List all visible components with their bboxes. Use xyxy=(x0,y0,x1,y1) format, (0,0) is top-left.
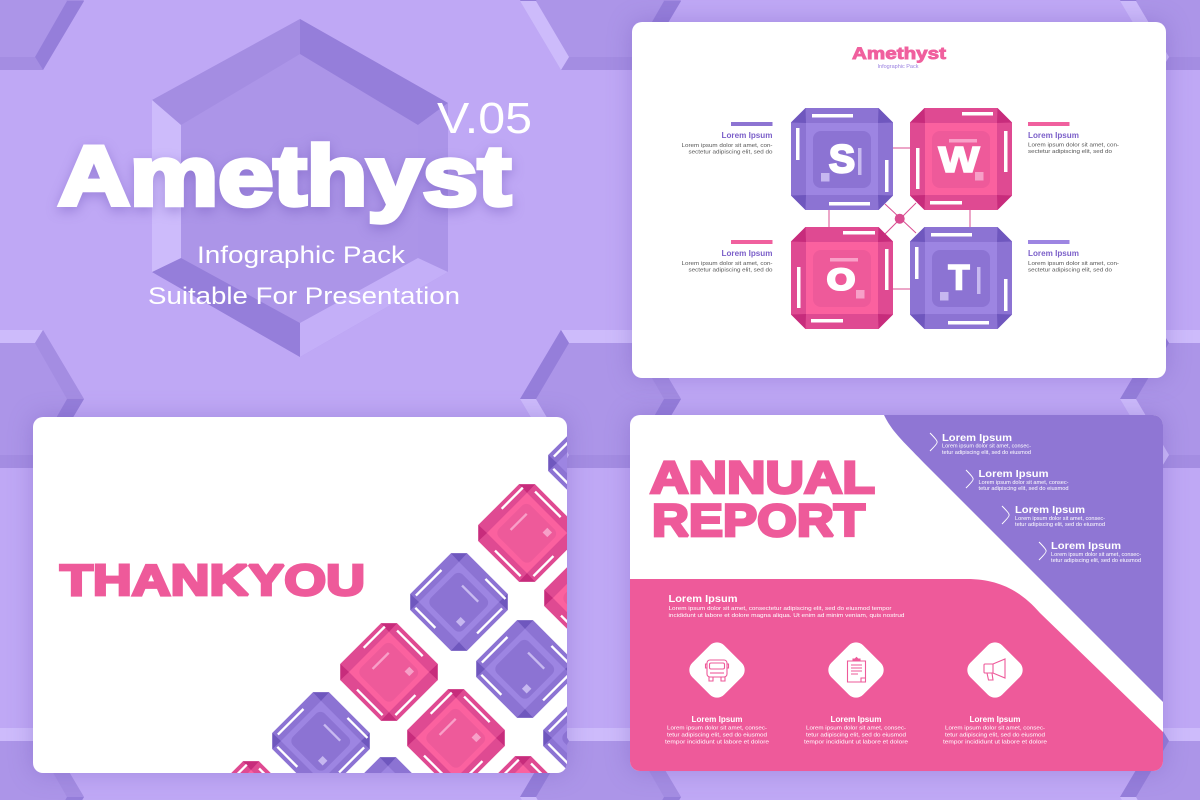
icon label 3 xyxy=(943,714,1047,746)
purple list item 3 xyxy=(1002,504,1105,528)
icon label 3: Lorem ipsum dolor sit amet, consec- xyxy=(945,726,1045,732)
SWOT label: upper left xyxy=(682,122,773,156)
thank you heading: THANKYOU xyxy=(60,556,365,605)
purple list item 4 xyxy=(1039,540,1141,564)
icon label 1: Lorem ipsum dolor sit amet, consec- xyxy=(667,726,767,732)
icon label 2: Lorem ipsum dolor sit amet, consec- xyxy=(806,726,906,732)
SWOT label: upper right: sectetur adipiscing elit, sed do xyxy=(1028,149,1112,155)
purple list item 4: Lorem ipsum dolor sit amet, consec- xyxy=(1051,552,1141,558)
purple list item 3: Lorem Ipsum xyxy=(1015,504,1085,516)
SWOT heading xyxy=(852,44,946,70)
SWOT label: upper right xyxy=(1028,122,1119,155)
purple list item 2 xyxy=(966,468,1069,492)
SWOT label: upper right: Lorem Ipsum xyxy=(1028,130,1079,140)
purple list item 2: tetur adipiscing elit, sed do eiusmod xyxy=(978,486,1068,492)
main title: Amethyst xyxy=(58,129,511,223)
SWOT label: lower left xyxy=(682,240,773,274)
SWOT label: lower right: sectetur adipiscing elit, sed do xyxy=(1028,268,1112,274)
SWOT label: upper left: Lorem Ipsum xyxy=(722,130,773,140)
SWOT label: lower left: Lorem ipsum dolor sit amet, con- xyxy=(682,261,773,267)
purple list item 4: tetur adipiscing elit, sed do eiusmod xyxy=(1051,558,1141,564)
purple list item 4: Lorem Ipsum xyxy=(1051,540,1121,552)
SWOT label: lower right: Lorem Ipsum xyxy=(1028,248,1079,258)
version label: V.05 xyxy=(437,94,532,143)
SWOT label: lower right: Lorem ipsum dolor sit amet, con- xyxy=(1028,261,1119,267)
icon: clipboard xyxy=(824,638,888,702)
icon label 3: tetur adipiscing elit, sed do eiusmod xyxy=(945,732,1045,738)
pink intro text: Lorem ipsum dolor sit amet, consectetur adipiscing elit, sed do eiusmod tempor xyxy=(668,606,892,612)
icon label 2 xyxy=(804,714,908,746)
SWOT heading: Infographic Pack xyxy=(878,64,919,70)
SWOT label: upper right: Lorem ipsum dolor sit amet, con- xyxy=(1028,142,1119,148)
panel: annual report xyxy=(630,415,1163,771)
icon: megaphone xyxy=(963,638,1027,702)
purple list item 3: Lorem ipsum dolor sit amet, consec- xyxy=(1015,516,1105,522)
purple list item 1 xyxy=(930,432,1031,456)
subtitle: Infographic Pack xyxy=(197,242,406,269)
pink intro text: incididunt ut labore et dolore magna aliqua. Ut enim ad minim veniam, quis nostrud xyxy=(668,613,904,619)
annual report heading xyxy=(650,452,875,546)
icon label 1 xyxy=(665,714,769,746)
pink intro text xyxy=(668,593,904,619)
icon label 1: tempor incididunt ut labore et dolore xyxy=(665,740,769,746)
panel: SWOT xyxy=(632,22,1166,378)
SWOT label: upper left: Lorem ipsum dolor sit amet, con- xyxy=(682,143,773,149)
icon label 1: tetur adipiscing elit, sed do eiusmod xyxy=(667,732,767,738)
icon: bus xyxy=(685,638,749,702)
gem S: S xyxy=(829,138,855,181)
icon label 2: tempor incididunt ut labore et dolore xyxy=(804,740,908,746)
purple corner section xyxy=(884,415,1163,702)
gem W: W xyxy=(938,139,980,180)
purple list item 1: tetur adipiscing elit, sed do eiusmod xyxy=(942,450,1031,456)
pink intro text: Lorem Ipsum xyxy=(668,593,738,605)
purple list item 1: Lorem ipsum dolor sit amet, consec- xyxy=(942,444,1031,450)
gem O: O xyxy=(827,264,855,296)
SWOT label: lower left: sectetur adipiscing elit, sed do xyxy=(688,268,772,274)
SWOT heading: Amethyst xyxy=(852,44,946,63)
gem S xyxy=(791,108,893,210)
gem T: T xyxy=(948,258,970,298)
purple list item 3: tetur adipiscing elit, sed do eiusmod xyxy=(1015,522,1105,528)
large amethyst hexagon xyxy=(152,19,448,357)
SWOT label: lower left: Lorem Ipsum xyxy=(722,248,773,258)
purple list item 2: Lorem ipsum dolor sit amet, consec- xyxy=(978,480,1069,486)
connector lines xyxy=(829,148,970,289)
annual report heading: REPORT xyxy=(652,495,865,546)
icon label 3: tempor incididunt ut labore et dolore xyxy=(943,740,1047,746)
annual report heading: ANNUAL xyxy=(650,452,875,503)
gem W xyxy=(910,108,1012,210)
gem O xyxy=(791,227,893,329)
SWOT label: lower right xyxy=(1028,240,1119,274)
purple list item 1: Lorem Ipsum xyxy=(942,432,1012,444)
SWOT label: upper left: sectetur adipiscing elit, sed do xyxy=(688,150,772,156)
pink lower section xyxy=(630,579,1163,771)
icon label 3: Lorem Ipsum xyxy=(970,714,1021,724)
gem pattern xyxy=(231,436,567,773)
subtitle: Suitable For Presentation xyxy=(148,283,460,310)
panel: thank you xyxy=(24,408,576,780)
subtitle xyxy=(148,242,460,310)
purple list item 2: Lorem Ipsum xyxy=(978,468,1048,480)
icon label 2: Lorem Ipsum xyxy=(830,714,882,724)
icon label 1: Lorem Ipsum xyxy=(692,714,743,724)
gem T xyxy=(910,227,1012,329)
icon label 2: tetur adipiscing elit, sed do eiusmod xyxy=(806,732,906,738)
